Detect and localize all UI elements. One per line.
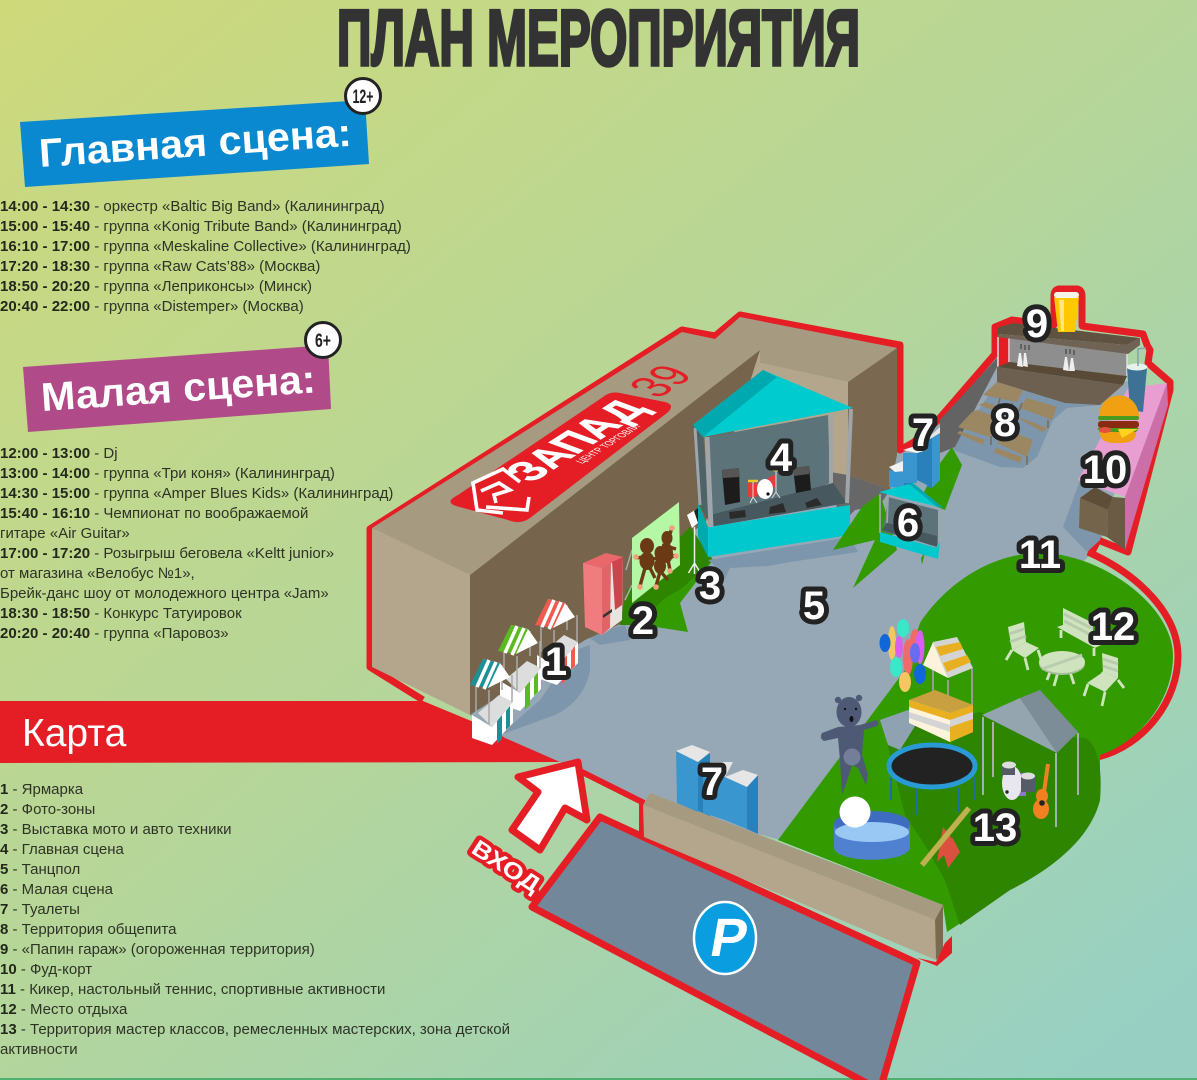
building: side wall [470,350,760,715]
legend list: 5 - Танцпол [0,861,80,878]
venue red outline [370,289,1170,700]
schedule: main stage: 15:00 - 15:40 - группа «Konig Tribute Band» (Калининград) [0,218,402,235]
schedule: small stage: 18:30 - 18:50 - Конкурс Татуировок [0,605,242,622]
zone numbers: 1 [545,640,567,684]
legend list: 4 - Главная сцена [0,841,124,858]
building: right block [848,348,897,490]
schedule: small stage [0,445,393,642]
entrance arrow [512,762,587,850]
schedule: small stage: 13:00 - 14:00 - группа «Три коня» (Калининград) [0,465,335,482]
icon: toilets (lower) [676,745,758,834]
schedule: small stage: 17:00 - 17:20 - Розыгрыш беговела «Keltt junior» [0,545,334,562]
green stall [498,625,541,711]
schedule: main stage: 14:00 - 14:30 - оркестр «Baltic Big Band» (Калининград) [0,198,385,215]
bar floor shade [953,383,1100,468]
icon: canopy tent [982,690,1078,827]
badge 6+ [306,322,340,358]
icon: photo booth [583,553,623,635]
badge 6+: 6+ [315,331,331,352]
zone red arc [1088,552,1178,757]
zone numbers: 5 [803,584,825,628]
zone numbers: 7 [701,760,723,804]
sign: ЗАПАД logo: ЗАПАД [494,395,658,487]
schedule: small stage: гитаре «Air Guitar» [0,525,130,542]
building: roof [372,317,897,575]
schedule: small stage: от магазина «Велобус №1», [0,565,195,582]
icon: balloons [880,619,926,692]
schedule: main stage: 16:10 - 17:00 - группа «Meskaline Collective» (Калининград) [0,238,411,255]
icon: trampoline [889,745,975,815]
map legend band: Карта [22,712,127,755]
icon: fair stalls [470,599,578,745]
sign: ЗАПАД logo: ЦЕНТР ТОРГОВЛИ [574,423,644,465]
icon: lamp stand [687,508,700,574]
icon: seesaw [922,808,969,868]
zone numbers: 7 [912,411,934,455]
small stage [879,483,943,559]
icon: burger [1097,396,1139,443]
legend list [0,781,510,1058]
posts [695,428,700,505]
green spikes [833,447,962,588]
icon: kiosk [909,637,973,742]
legend list: активности [0,1041,78,1058]
red stall [535,599,578,685]
floor [470,355,1145,840]
building: front face [372,528,470,715]
legend list: 10 - Фуд-корт [0,961,92,978]
schedule: main stage [0,198,411,315]
roof [693,370,853,437]
legend list: 2 - Фото-зоны [0,801,95,818]
parking lot [532,817,917,1080]
main stage [693,370,853,557]
icon: garden furniture [1006,608,1124,706]
icon: beer [1054,292,1079,332]
zone numbers: 13 [973,806,1017,850]
crate [1079,487,1125,550]
heading: small stage [23,322,340,432]
zone numbers: 3 [699,564,721,608]
zone numbers: 9 [1026,302,1048,346]
legend list: 11 - Кикер, настольный теннис, спортивные активности [0,981,385,998]
bottles [1017,353,1075,371]
floor shadow: shops [500,645,590,735]
zone numbers: 8 [994,401,1016,445]
drum kit [748,470,781,503]
schedule: main stage: 18:50 - 20:20 - группа «Леприконсы» (Минск) [0,278,312,295]
badge 12+: 12+ [352,87,374,108]
building: recess back wall [700,350,848,540]
icon: teddy bear [821,695,878,795]
entrance label: ВХОД [467,834,545,898]
fence segment [578,770,642,835]
schedule: small stage: 14:30 - 15:00 - группа «Amper Blues Kids» (Калининград) [0,485,393,502]
heading: small stage: Малая сцена: [40,357,317,420]
icon: photo banner with monkeys [625,502,680,603]
icon: pool [834,796,910,860]
zone numbers: 10 [1083,448,1127,492]
map legend band [0,701,560,763]
zone numbers: 6 [897,501,919,545]
logo mark [473,469,529,513]
speakers [722,466,822,519]
zone numbers: 4 [770,436,793,480]
schedule: small stage: Брейк-данс шоу от молодежного центра «Jam» [0,585,329,602]
map [370,289,1178,1080]
legend list: 6 - Малая сцена [0,881,114,898]
legend list: 7 - Туалеты [0,901,80,918]
boundary wall [643,793,943,960]
sign: ЗАПАД logo [450,359,705,522]
food court counter [1063,383,1168,552]
schedule: small stage: 15:40 - 16:10 - Чемпионат по воображаемой [0,505,308,522]
bar: papa's garage [997,323,1140,405]
parking sign [694,902,756,974]
badge 12+ [346,78,380,114]
zone numbers [545,302,1135,850]
teal stall [470,659,513,745]
floor shadow: stage [708,537,858,585]
legend list: 3 - Выставка мото и авто техники [0,821,231,838]
zone numbers: 11 [1019,533,1061,577]
sign: ЗАПАД logo: 39 [616,359,705,403]
zone numbers: 2 [632,599,654,643]
icon: picnic tables [957,382,1057,465]
green patch by photo zone [620,527,713,632]
parking sign: P [706,907,753,968]
legend list: 13 - Территория мастер классов, ремесленных мастерских, зона детской [0,1021,510,1038]
dark green zone 13 [887,712,1101,925]
heading: main stage [20,78,380,187]
heading: main stage: Главная сцена: [38,111,353,176]
icon: guitar [1033,764,1049,819]
zone numbers: 12 [1091,605,1135,649]
schedule: small stage: 12:00 - 13:00 - Dj [0,445,118,462]
floor shards [880,710,920,750]
schedule: small stage: 20:20 - 20:40 - группа «Паровоз» [0,625,229,642]
icon: toilets (upper) [889,427,940,488]
legend list: 8 - Территория общепита [0,921,177,938]
icon: drum set [1002,762,1035,800]
legend list: 12 - Место отдыха [0,1001,128,1018]
icon: drink cup [1126,348,1148,412]
legend list: 1 - Ярмарка [0,781,84,798]
green zone 11-12 [778,553,1173,932]
legend list: 9 - «Папин гараж» (огороженная территория) [0,941,315,958]
schedule: main stage: 20:40 - 22:00 - группа «Distemper» (Москва) [0,298,304,315]
schedule: main stage: 17:20 - 18:30 - группа «Raw Cats’88» (Москва) [0,258,320,275]
